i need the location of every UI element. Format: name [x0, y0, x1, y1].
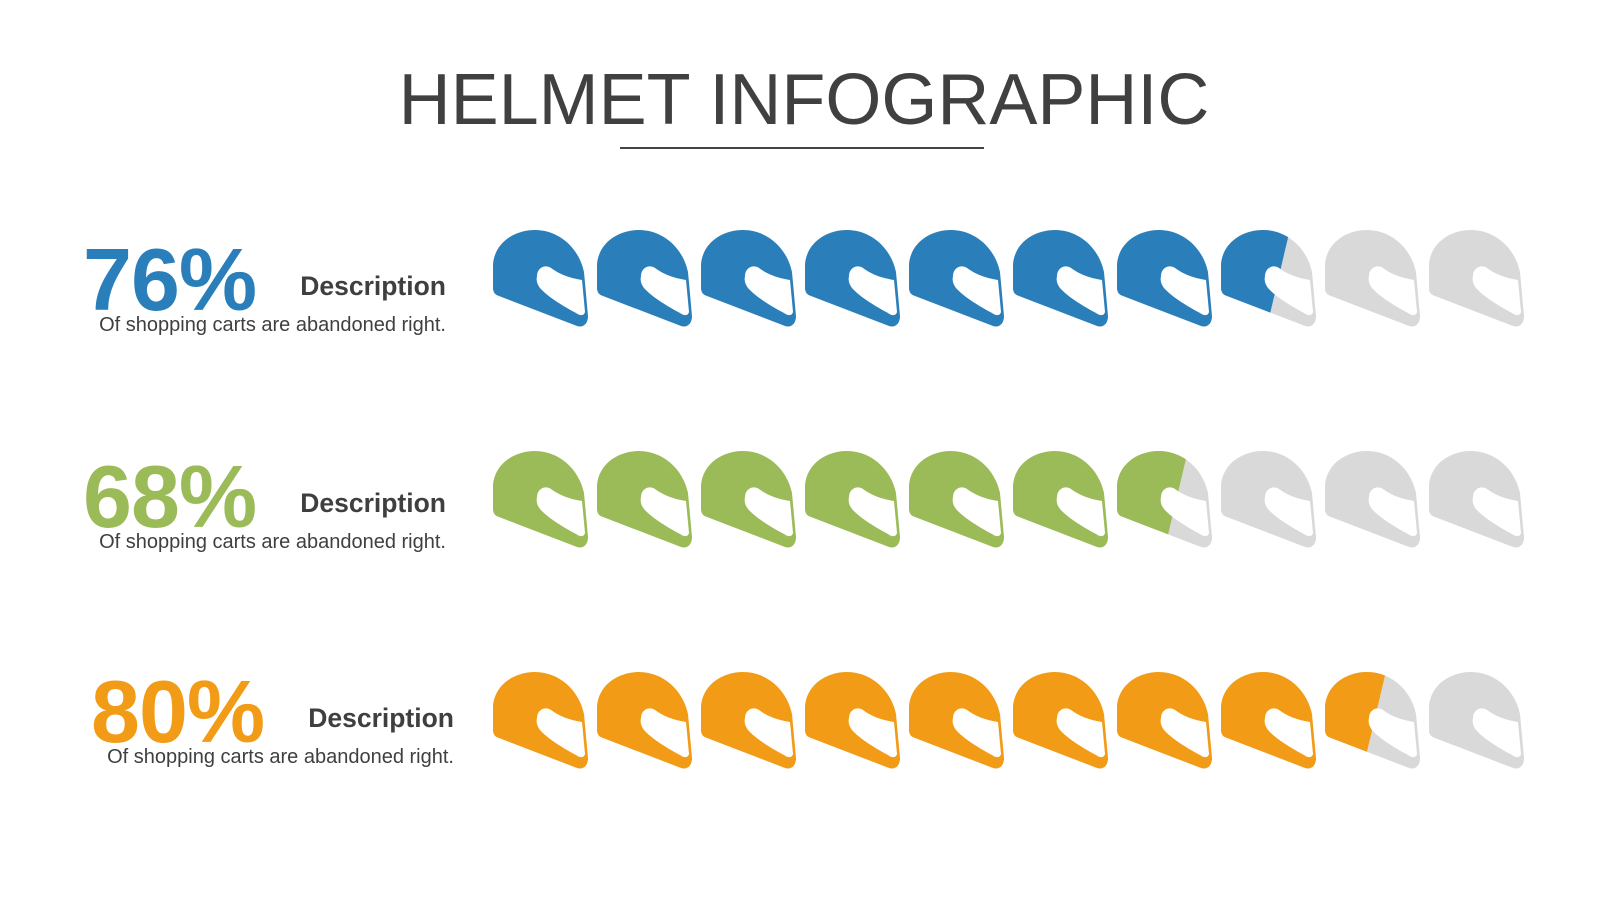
description heading: Description — [300, 488, 446, 518]
helmet row: orange 80% — [493, 672, 1524, 769]
row 2 text — [83, 447, 446, 553]
row 3 text — [91, 662, 454, 768]
description text: Of shopping carts are abandoned right. — [99, 531, 446, 553]
row 1 text — [83, 230, 446, 336]
helmet row: blue 76% — [493, 230, 1524, 327]
description heading: Description — [300, 271, 446, 301]
title: HELMET INFOGRAPHIC — [399, 60, 1209, 140]
percent 80: 80% — [91, 662, 264, 761]
percent 76: 76% — [83, 230, 256, 329]
percent 68: 68% — [83, 447, 256, 546]
description text: Of shopping carts are abandoned right. — [99, 314, 446, 336]
helmet row: green 68% — [493, 451, 1524, 548]
description heading: Description — [308, 703, 454, 733]
description text: Of shopping carts are abandoned right. — [107, 746, 454, 768]
